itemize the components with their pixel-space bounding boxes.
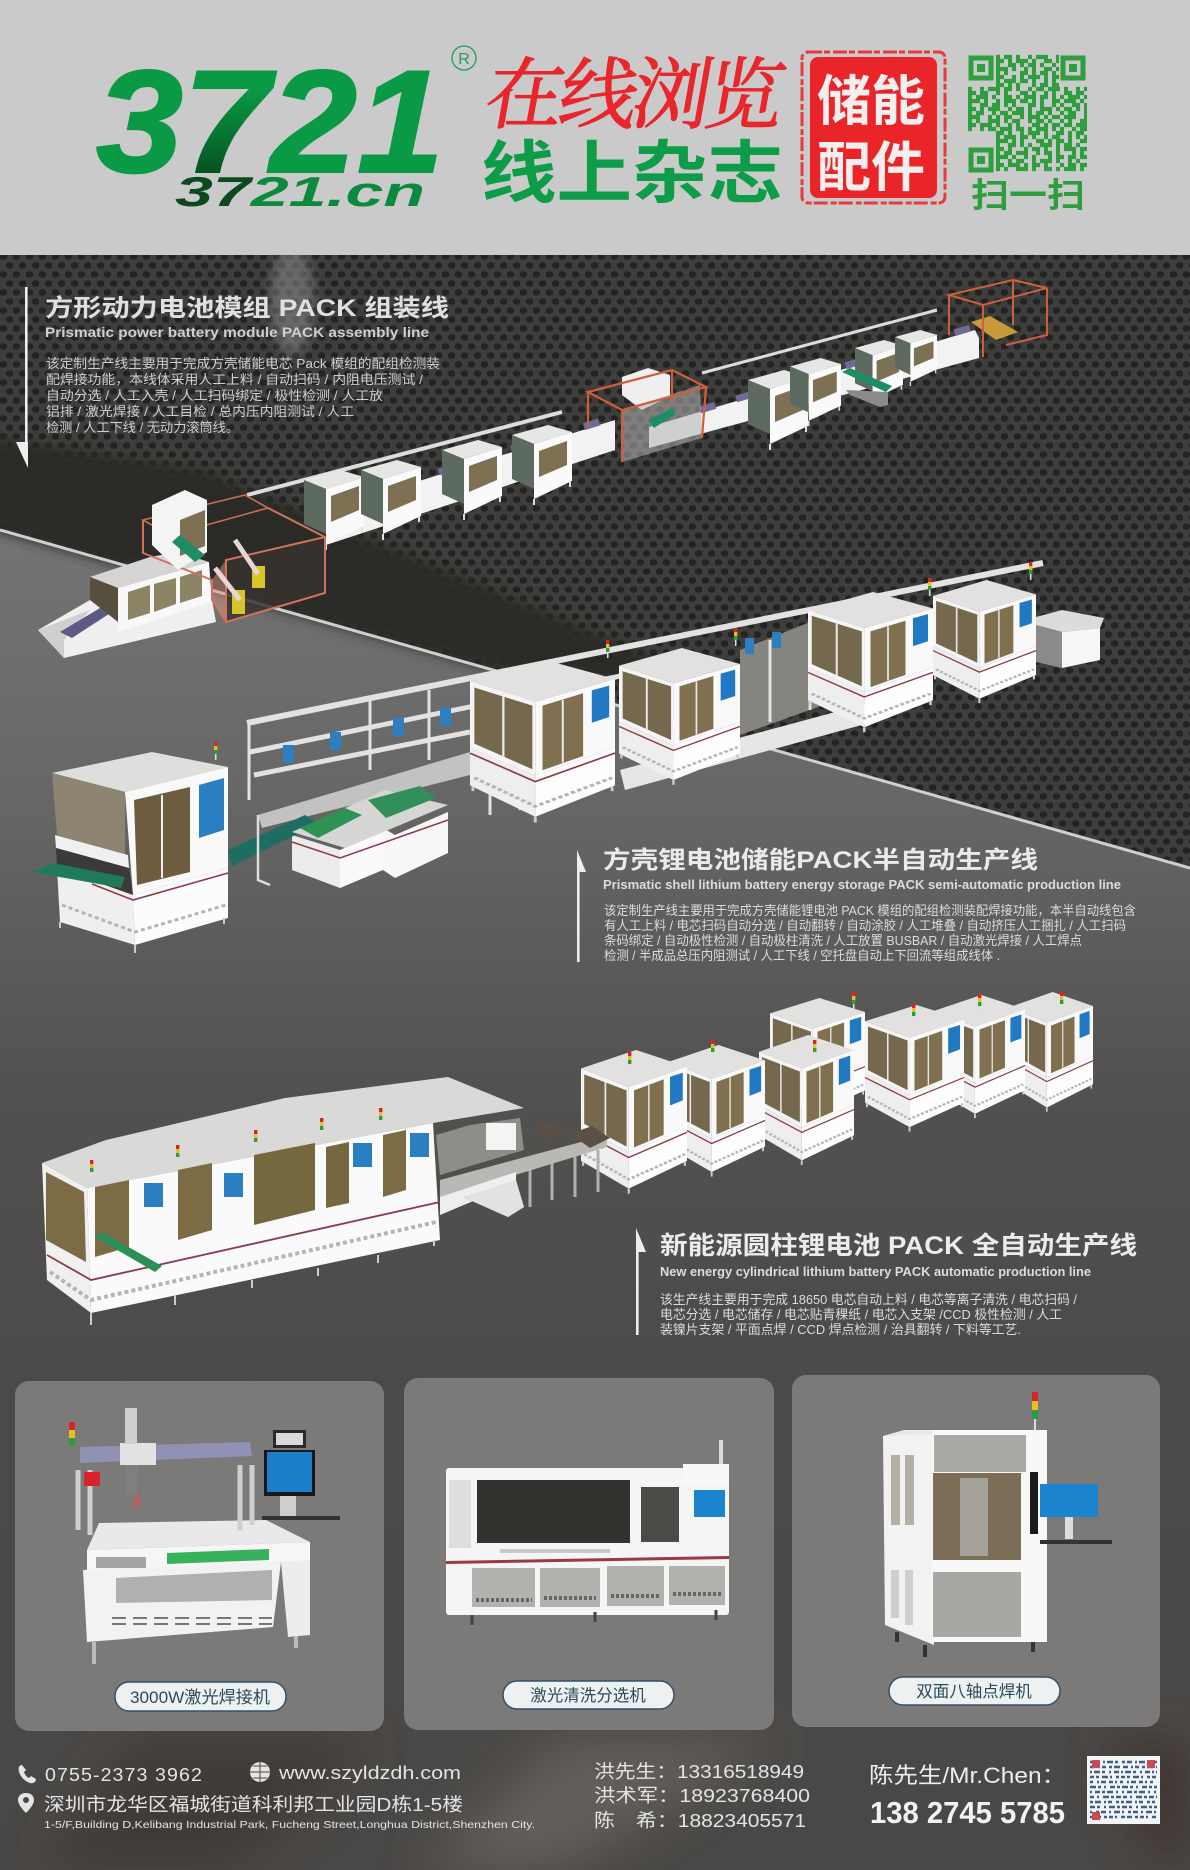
label pill: 3000W激光焊接机 <box>130 1688 270 1707</box>
section 2 text <box>603 846 1136 963</box>
main contact name: 陈先生/Mr.Chen： <box>869 1763 1066 1788</box>
transfer conveyor <box>436 1118 610 1217</box>
arrow: section 1 down <box>16 287 28 468</box>
section 1 text: 配焊接功能，本线体采用人工上料 / 自动扫码 / 内阻电压测试 / <box>46 372 423 387</box>
section 1 text <box>45 294 449 435</box>
QR code green <box>968 57 1087 170</box>
station A large <box>32 742 228 953</box>
header band <box>0 0 1190 255</box>
machine: 3000W laser welder <box>69 1408 340 1664</box>
3721 logo: 37 21.cn <box>175 168 425 215</box>
section 3 text <box>660 1232 1137 1337</box>
QR code footer <box>1087 1756 1160 1824</box>
long left machine <box>42 1077 524 1325</box>
line 2 rails <box>247 563 1043 828</box>
section 1 text: 该定制生产线主要用于完成方壳储能电芯 Pack 模组的配组检测装 <box>46 356 440 371</box>
main contact number: 138 2745 5785 <box>870 1795 1065 1830</box>
address: 深圳市龙华区福城街道科利邦工业园D栋1-5楼 <box>44 1794 463 1815</box>
panel: laser welder <box>15 1381 384 1731</box>
back station <box>770 992 865 1118</box>
label pill <box>115 1682 286 1711</box>
section 1 text: 检测 / 人工下线 / 无动力滚筒线。 <box>46 420 239 435</box>
station D <box>808 578 933 732</box>
section 3 text: 装镍片支架 / 平面点焊 / CCD 焊点检测 / 治具翻转 / 下料等工艺. <box>660 1322 1021 1337</box>
arrow: section 3 up <box>636 1228 646 1335</box>
station C <box>619 628 740 785</box>
station E <box>933 562 1036 703</box>
website: www.szyldzdh.com <box>278 1763 461 1783</box>
line 1 segment B <box>649 310 979 450</box>
footer contact block <box>18 1756 1160 1831</box>
label pill: 双面八轴点焊机 <box>916 1682 1032 1701</box>
arrow: section 2 up <box>577 850 586 962</box>
production line 2: semi-automatic line <box>32 562 1104 953</box>
label pill <box>889 1677 1060 1705</box>
icon: globe <box>250 1762 270 1782</box>
end unit <box>1036 610 1104 668</box>
panel: dual-side eight-axis spot welder <box>792 1375 1160 1727</box>
mid cabinets with conveyor <box>228 786 448 888</box>
section 2 text: 方壳锂电池储能PACK半自动生产线 <box>603 846 1038 874</box>
section 2 text: Prismatic shell lithium battery energy storage PACK semi-automatic production line <box>603 877 1121 892</box>
contacts list <box>594 1761 810 1831</box>
contacts list: 陈 希：18823405571 <box>594 1810 806 1831</box>
section 3 text: New energy cylindrical lithium battery PACK automatic production line <box>660 1264 1091 1279</box>
3721 logo: 3721 <box>96 40 444 203</box>
section 1 text: 铝排 / 激光焊接 / 人工目检 / 总内压内阻测试 / 人工 <box>46 404 354 419</box>
label pill <box>503 1681 674 1709</box>
station row right <box>1009 992 1093 1112</box>
label pill: 激光清洗分选机 <box>530 1686 646 1705</box>
red stamp <box>802 52 945 203</box>
section 1 text: 自动分选 / 人工入壳 / 人工扫码绑定 / 极性检测 / 人工放 <box>46 388 383 403</box>
section 2 text: 条码绑定 / 自动极性检测 / 自动极柱清洗 / 人工放置 BUSBAR / 自动激光焊接 / 人工焊点 <box>604 933 1082 948</box>
section 2 text: 有人工上料 / 电芯扫码自动分选 / 自动翻转 / 自动涂胶 / 人工堆叠 / 自动挤压人工捆扎 / 人工扫码 <box>604 918 1126 933</box>
station B <box>470 640 615 822</box>
section 2 text: 检测 / 半成品总压内阻测试 / 人工下线 / 空托盘自动上下回流等组成线体 . <box>604 948 1000 963</box>
red stamp: 配件 <box>817 123 925 202</box>
robot cage 2 <box>588 368 706 462</box>
icon: phone <box>19 1765 36 1783</box>
section 3 text: 电芯分选 / 电芯储存 / 电芯贴青稞纸 / 电芯入支架 /CCD 极性检测 / 人工 <box>660 1307 1062 1322</box>
robot cage 3 <box>949 280 1047 357</box>
front loading module <box>38 552 216 658</box>
production line 3: cylindrical automatic line <box>42 992 1093 1325</box>
contacts list: 洪术军：18923768400 <box>594 1785 810 1806</box>
phone number: 0755-2373 3962 <box>45 1765 203 1785</box>
machine: spot welder <box>883 1392 1112 1657</box>
handwritten red heading: 在线浏览 <box>478 34 796 145</box>
robot cage 1 <box>143 490 325 622</box>
red stamp: 储能 <box>817 57 925 136</box>
icon: pin <box>18 1793 34 1813</box>
section 3 text: 该生产线主要用于完成 18650 电芯自动上料 / 电芯等离子清洗 / 电芯扫码 / <box>660 1292 1077 1307</box>
line 1 segment A <box>247 412 615 550</box>
english address: 1-5/F,Building D,Kelibang Industrial Park, Fucheng Street,Longhua District,Shenzhen City. <box>44 1819 535 1831</box>
green magazine heading: 线上杂志 <box>481 118 783 217</box>
section 3 text: 新能源圆柱锂电池 PACK 全自动生产线 <box>660 1232 1137 1260</box>
production line 1: prismatic assembly line <box>38 280 1047 658</box>
section 1 text: 方形动力电池模组 PACK 组装线 <box>45 294 449 322</box>
section 1 text: Prismatic power battery module PACK assembly line <box>45 324 429 340</box>
contacts list: 洪先生：13316518949 <box>594 1761 804 1782</box>
panel: laser cleaning sorter <box>404 1378 774 1730</box>
machine: laser cleaning sorter <box>446 1440 729 1625</box>
scan label: 扫一扫 <box>971 168 1085 217</box>
section 2 text: 该定制生产线主要用于完成方壳储能锂电池 PACK 模组的配组检测装配焊接功能，本半自动线包含 <box>604 903 1136 918</box>
3721 logo: R <box>458 51 470 68</box>
